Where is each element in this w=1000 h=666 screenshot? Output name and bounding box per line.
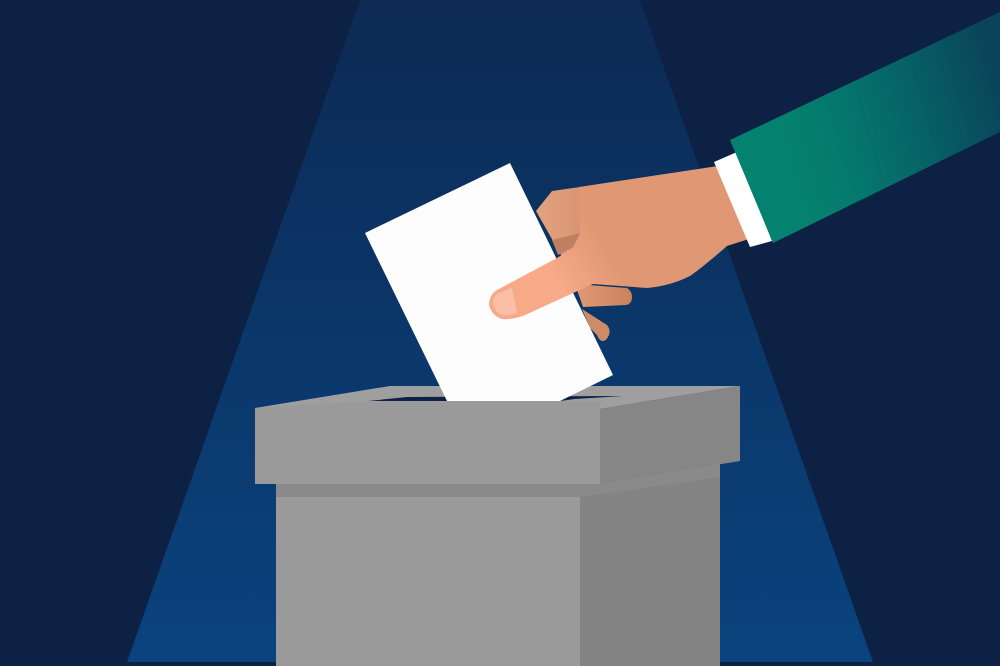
box body front: [276, 484, 581, 666]
thumb shadow: [552, 233, 580, 255]
ballot slot: [368, 396, 623, 401]
box body side: [580, 464, 720, 666]
ring finger: [582, 309, 610, 341]
lid shadow: [276, 464, 720, 497]
lid front: [255, 401, 600, 484]
hand behind ballot: fingers and thumb: [536, 187, 632, 341]
fingernail: [493, 288, 517, 315]
ballot paper: [365, 163, 613, 401]
shirt cuff: [714, 152, 772, 247]
middle finger: [575, 284, 632, 307]
thumb: [536, 187, 585, 262]
lid top: [255, 386, 740, 409]
lid side: [600, 386, 740, 484]
hand front and index finger: [489, 166, 752, 319]
jacket sleeve: [730, 12, 1000, 243]
light beam: [127, 0, 873, 662]
ballot box: [255, 386, 740, 666]
